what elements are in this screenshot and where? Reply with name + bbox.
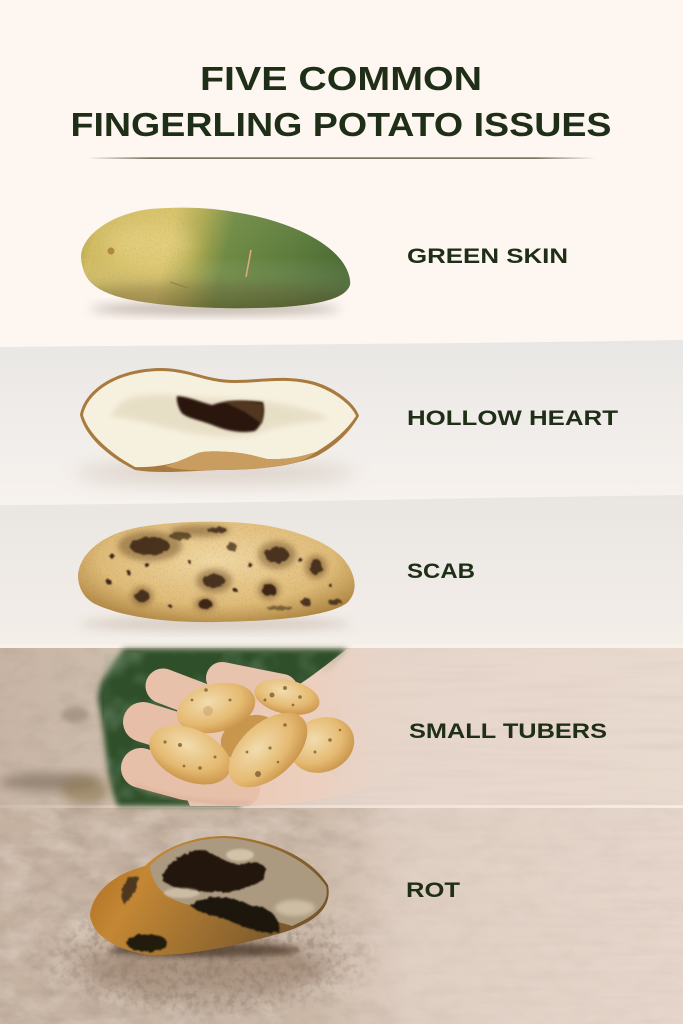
hand [121, 649, 350, 806]
photo: green skin potato [70, 200, 360, 315]
foliage behind hand [98, 649, 347, 806]
panel: small tubers band [0, 648, 683, 808]
photo: scab potato [78, 522, 355, 622]
photo: rotted potato [90, 836, 329, 957]
label: rot: ROT [406, 879, 460, 902]
soil under rotted potato [48, 914, 372, 1016]
panel: header background [0, 0, 683, 348]
photo: hollow heart potato [80, 368, 359, 472]
soil patch left of hand [0, 707, 109, 804]
title [70, 60, 612, 143]
label: scab: SCAB [407, 560, 475, 583]
label: small tubers: SMALL TUBERS [409, 720, 607, 743]
title: FINGERLING POTATO ISSUES [70, 106, 612, 143]
panel: hollow heart band [0, 340, 683, 505]
palm [188, 649, 350, 806]
finger: middle [143, 722, 185, 735]
finger: ring [163, 686, 205, 702]
finger: little [222, 678, 282, 690]
label: hollow heart: HOLLOW HEART [407, 407, 618, 430]
small tubers [140, 674, 363, 802]
title: FIVE COMMON [200, 60, 482, 97]
title underline [88, 158, 596, 159]
finger: index [141, 768, 240, 788]
panel: scab band [0, 495, 683, 648]
brown halos around scab lesions [118, 525, 327, 611]
label: green skin: GREEN SKIN [407, 245, 568, 268]
panel: rot band [0, 808, 683, 1024]
